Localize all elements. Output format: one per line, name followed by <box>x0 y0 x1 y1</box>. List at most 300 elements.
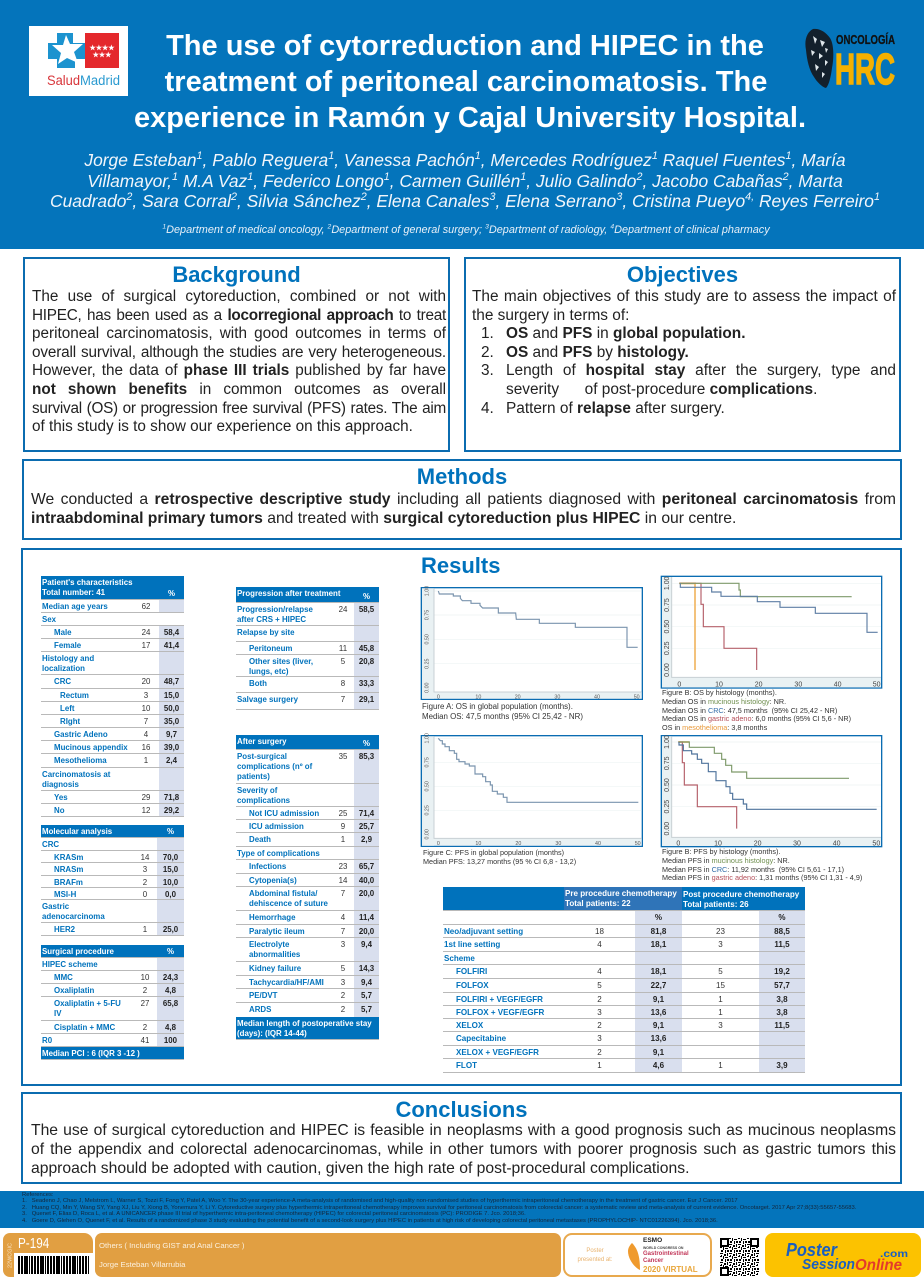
table: chemotherapy: 22,7 <box>651 980 666 990</box>
table: progression after treatment: 33,3 <box>359 678 374 688</box>
table: chemotherapy: 11,5 <box>774 1020 790 1030</box>
footer: category and presenter: Jorge Esteban Villarrubia <box>99 1260 185 1269</box>
table: after surgery <box>236 735 379 1040</box>
table: surgical procedure: 100 <box>164 1036 177 1044</box>
table: molecular analysis: KRASm <box>54 852 83 862</box>
chart C: PFS in global population: 40 <box>595 841 601 847</box>
logo: Oncología HRC <box>805 28 895 90</box>
table: chemotherapy: 81,8 <box>651 926 666 936</box>
table: patient's characteristics: 29 <box>142 792 150 802</box>
table: molecular analysis <box>41 825 184 936</box>
chart B: OS by histology <box>660 576 882 689</box>
table: chemotherapy: Total patients: 22 <box>565 899 631 908</box>
table: patient's characteristics: 58,4 <box>164 628 179 636</box>
table: patient's characteristics: 62 <box>142 602 150 610</box>
text: background: survival (OS) or progression free survival (PFS) rates. The aim <box>32 400 446 417</box>
table: after surgery: 40,0 <box>359 876 374 884</box>
table: molecular analysis: MSI-H <box>54 890 76 898</box>
table: after surgery: Not ICU admission <box>249 808 319 818</box>
table: after surgery: Post-surgical <box>237 752 287 760</box>
table: molecular analysis: 2 <box>143 878 147 886</box>
table: progression after treatment: 58,5 <box>359 604 374 614</box>
table: after surgery: ICU admission <box>249 822 304 830</box>
table: chemotherapy: FOLFIRI + VEGF/EGFR <box>456 994 543 1004</box>
table: chemotherapy: 18,1 <box>651 966 666 976</box>
chart B: OS by histology: 50 <box>873 682 881 689</box>
table: chemotherapy: 3,9 <box>776 1060 788 1070</box>
table: patient's characteristics: 10 <box>142 704 150 712</box>
footer: category and presenter <box>95 1233 561 1277</box>
table: after surgery: 4 <box>341 912 345 922</box>
session code: 22WCGIC <box>8 1243 14 1268</box>
congress name: Gastrointestinal <box>643 1251 689 1257</box>
text: background: not shown benefits in common outcomes as overall <box>32 381 446 398</box>
chart C: PFS in global population: 0.50 <box>424 781 430 792</box>
table: chemotherapy: 2 <box>597 1048 602 1056</box>
title <box>134 30 806 134</box>
table: patient's characteristics: Total number: 41 <box>42 588 105 597</box>
table: after surgery: 20,0 <box>359 926 374 936</box>
table: patient's characteristics: Female <box>54 640 81 650</box>
caption: figure B <box>662 688 851 732</box>
table: chemotherapy: 9,1 <box>653 1048 664 1056</box>
icon: wheat <box>628 1243 640 1270</box>
table: molecular analysis: Gastric <box>42 902 69 910</box>
congress name: 2020 VIRTUAL <box>643 1265 698 1274</box>
table: patient's characteristics: 35,0 <box>164 716 179 726</box>
footer: presented at badge <box>563 1233 712 1277</box>
barcode <box>14 1253 93 1277</box>
table: after surgery: Cytopenia(s) <box>249 876 297 884</box>
table: patient's characteristics: % <box>168 589 175 598</box>
table: after surgery: Median length of postoperative stay <box>237 1018 372 1028</box>
table: chemotherapy: 3 <box>597 1034 602 1042</box>
text: objectives: the surgery in terms of: <box>472 307 629 324</box>
references band: 4. Goere D, Glehen O, Quenet F, et al. Results of a randomized phase 3 study evaluating the potential benefit of a second-look surgery plus HIPEC in patients at high risk of developing colorectal peritoneal metastases (PROPHYLOCHIP- NTC01226394). Jco. 2018;36. <box>22 1218 718 1224</box>
text: objectives: 4. <box>481 400 494 417</box>
table: after surgery: 14,3 <box>359 964 374 972</box>
chart B: OS by histology: 0.75 <box>664 598 671 612</box>
chart A: OS in global population <box>420 586 643 700</box>
chart B: OS by histology: 1.00 <box>664 576 671 590</box>
chart D: PFS by histology: 50 <box>872 840 880 847</box>
congress name: Cancer <box>643 1258 663 1264</box>
table: patient's characteristics: 3 <box>144 690 148 700</box>
table: patient's characteristics: Gastric Adeno <box>54 730 108 738</box>
table: surgical procedure: Median PCI : 6 (IQR 3 -12 ) <box>42 1048 140 1058</box>
chart B: OS by histology: 0.25 <box>664 641 671 655</box>
affiliations: 1Department of medical oncology, 2Department of general surgery; 3Department of radiology, 4Department of clinical pharmacy <box>162 223 770 236</box>
table: chemotherapy: XELOX <box>456 1020 483 1030</box>
table: after surgery: Death <box>249 834 271 844</box>
table: after surgery: 9,4 <box>361 940 372 948</box>
table: after surgery: Abdominal fistula/ <box>249 888 317 898</box>
table: chemotherapy: 3 <box>597 1008 602 1016</box>
text: conclusions: The use of surgical cytoreduction and HIPEC is feasible in neoplasms with a good prognosis such as mucinous neoplasms <box>31 1122 896 1139</box>
text: objectives: OS and PFS in global population. <box>506 325 745 342</box>
text: conclusions <box>31 1122 896 1177</box>
table: chemotherapy: 2 <box>597 994 602 1004</box>
table: patient's characteristics: 17 <box>142 640 150 650</box>
chart A: OS in global population: 0.25 <box>424 658 430 669</box>
footer: QR code <box>720 1238 759 1276</box>
chart A: OS in global population: 0.50 <box>424 634 430 645</box>
table: molecular analysis: Molecular analysis <box>42 826 112 836</box>
table: chemotherapy: 18 <box>595 926 604 936</box>
table: progression after treatment: 7 <box>341 694 345 704</box>
table: surgical procedure <box>41 945 184 1060</box>
chart A: OS in global population: 0.00 <box>424 682 430 693</box>
table: surgical procedure: Surgical procedure <box>42 946 114 956</box>
text: objectives <box>472 288 896 417</box>
text: background: peritoneal carcinomatosis, with good outcomes in terms of <box>32 325 446 342</box>
table: surgical procedure: Oxaliplatin <box>54 986 94 994</box>
table: surgical procedure: 2 <box>143 1022 147 1032</box>
panel: background <box>23 257 450 452</box>
title: experience in Ramón y Cajal University Hospital. <box>134 102 806 134</box>
chart C: PFS in global population: 20 <box>515 841 521 847</box>
table: after surgery: Electrolyte <box>249 940 289 948</box>
table: patient's characteristics: diagnosis <box>42 780 79 788</box>
table: patient's characteristics: 4 <box>144 730 148 738</box>
table: chemotherapy: 5 <box>597 980 602 990</box>
chart D: PFS by histology <box>660 735 882 848</box>
table: after surgery: 2 <box>341 1004 345 1014</box>
table: patient's characteristics: 39,0 <box>164 742 179 752</box>
table: after surgery: 2,9 <box>361 834 372 844</box>
table: after surgery: complications (nº of <box>237 762 312 770</box>
table: patient's characteristics: 7 <box>144 716 148 726</box>
chart B: OS by histology: 0 <box>677 682 681 689</box>
heading: results: Results <box>421 553 500 578</box>
table: molecular analysis: NRASm <box>54 864 83 874</box>
chart C: PFS in global population: 30 <box>555 841 561 847</box>
heading: methods: Methods <box>417 464 507 489</box>
text: background: However, the data of phase III trials published by far have <box>32 362 446 379</box>
table: patient's characteristics: Rectum <box>60 690 89 700</box>
table: molecular analysis: 15,0 <box>163 864 178 874</box>
table: patient's characteristics: 1 <box>144 756 148 764</box>
caption: figure B: Median OS in gastric adeno: 6,0 months (95% CI 5,6 - NR) <box>662 714 851 723</box>
table: after surgery: Infections <box>249 862 286 870</box>
table: molecular analysis: 10,0 <box>163 878 178 886</box>
table: surgical procedure: 24,3 <box>163 972 178 982</box>
table: patient's characteristics: 41,4 <box>164 640 179 650</box>
chart B: OS by histology: 0.00 <box>664 663 671 677</box>
table: molecular analysis: 0,0 <box>165 890 176 898</box>
table: chemotherapy: 1 <box>718 1060 723 1070</box>
table: after surgery: dehiscence of suture <box>249 898 328 908</box>
table: chemotherapy: 11,5 <box>774 940 790 948</box>
title: treatment of peritoneal carcinomatosis. The <box>165 66 767 98</box>
table: chemotherapy: 9,1 <box>653 1020 664 1030</box>
panel: objectives <box>464 257 901 452</box>
table: after surgery: Paralytic ileum <box>249 926 305 936</box>
table: patient's characteristics: 24 <box>142 628 150 636</box>
table: progression after treatment: % <box>363 592 370 601</box>
table: after surgery: 5,7 <box>361 990 372 1000</box>
table: chemotherapy: 4 <box>597 940 602 948</box>
text: background: HIPEC, has been used as a locorregional approach to treat <box>32 307 446 324</box>
panel: methods <box>22 459 902 540</box>
chart C: PFS in global population: 0.25 <box>424 805 430 816</box>
chart D: PFS by histology: 0.00 <box>664 822 671 835</box>
chart B: OS by histology: 0.50 <box>664 620 671 633</box>
table: chemotherapy: 19,2 <box>774 966 790 976</box>
table: patient's characteristics: 15,0 <box>164 690 179 700</box>
table: chemotherapy: 3,8 <box>776 1008 788 1016</box>
text: background: overall survival, although the studies are very heterogeneous. <box>32 344 446 361</box>
table: patient's characteristics: 71,8 <box>164 792 179 802</box>
caption: figure D <box>662 847 862 882</box>
table: patient's characteristics: Mesothelioma <box>54 756 107 764</box>
references band: 3. Quenet F, Elias D, Roca L, et al. A UNICANCER phase III trial of hyperthermic intra-peritoneal chemotherapy (HIPEC) for colorectal peritoneal carcinomatosis (PC): PRODIGE 7. Jco. 2018;36. <box>22 1211 526 1217</box>
table: after surgery: % <box>363 739 370 748</box>
caption: figure D: Median PFS in mucinous histology: NR. <box>662 856 790 865</box>
text: conclusions: approach should be adopted with caution, given the high rate of post-procedural complications. <box>31 1160 689 1177</box>
table: chemotherapy: FOLFIRI <box>456 966 487 976</box>
footer: poster id and barcode <box>3 1233 93 1277</box>
chart D: PFS by histology: 0.75 <box>664 756 671 770</box>
caption: figure B: Median OS in mucinous histology: NR. <box>662 697 786 706</box>
text: background: of this study is to show our experience on this approach. <box>32 418 413 435</box>
table: patient's characteristics: 50,0 <box>164 704 179 712</box>
table: after surgery: ARDS <box>249 1004 271 1014</box>
table: patient's characteristics: 9,7 <box>166 730 177 738</box>
table: patient's characteristics: CRC <box>54 676 71 686</box>
table: progression after treatment: 11 <box>339 644 347 652</box>
text: objectives: The main objectives of this study are to assess the impact of <box>472 288 896 305</box>
text: methods: We conducted a retrospective descriptive study including all patients diagnosed with peritoneal carcinomatosis from <box>31 491 896 508</box>
table: after surgery: 5 <box>341 964 345 972</box>
table: after surgery: Hemorrhage <box>249 912 295 922</box>
caption: figure A <box>422 702 583 721</box>
table: after surgery: 1 <box>341 834 345 844</box>
table: after surgery: Type of complications <box>237 848 320 858</box>
table: surgical procedure: 10 <box>141 972 149 982</box>
table: patient's characteristics: Carcinomatosis at <box>42 770 110 778</box>
table: chemotherapy: 1st line setting <box>444 940 500 948</box>
header banner <box>0 0 924 249</box>
table: patient's characteristics: RIght <box>60 716 80 726</box>
table: after surgery: 9,4 <box>361 978 372 986</box>
logo: SaludMadrid: Madrid <box>80 73 120 88</box>
chart D: PFS by histology: 1.00 <box>664 735 671 749</box>
table: after surgery: 85,3 <box>359 752 374 760</box>
table: after surgery: PE/DVT <box>249 990 278 1000</box>
table: progression after treatment: Progression/relapse <box>237 604 313 614</box>
table: chemotherapy: FOLFOX + VEGF/EGFR <box>456 1008 544 1016</box>
table: progression after treatment: 24 <box>339 604 347 614</box>
table: chemotherapy: Total patients: 26 <box>683 900 749 909</box>
table: surgical procedure: 27 <box>141 998 149 1008</box>
table: molecular analysis: BRAFm <box>54 878 83 886</box>
text: objectives: 2. <box>481 344 494 361</box>
chart C: PFS in global population: 50 <box>635 841 641 847</box>
table: patient's characteristics: 48,7 <box>164 676 179 686</box>
table: after surgery: 3 <box>341 940 345 948</box>
table: after surgery: 3 <box>341 978 345 986</box>
table: chemotherapy: 13,6 <box>651 1008 666 1016</box>
table: progression after treatment: Both <box>249 678 267 688</box>
chart D: PFS by histology: 0 <box>676 840 680 847</box>
table: after surgery: 23 <box>339 862 347 870</box>
footer: PosterSessionOnline logo: Session <box>802 1256 855 1273</box>
table: after surgery: 71,4 <box>359 808 374 818</box>
table: molecular analysis: 70,0 <box>163 852 178 862</box>
table: patient's characteristics: localization <box>42 664 85 672</box>
caption: figure C <box>423 848 576 866</box>
caption: figure A: Figure A: OS in global population (months). <box>422 702 573 711</box>
logo: SaludMadrid: Salud <box>47 73 80 88</box>
table: molecular analysis: 1 <box>143 924 147 934</box>
congress name: ESMO <box>643 1237 662 1244</box>
table: progression after treatment: 45,8 <box>359 644 374 652</box>
text: conclusions: of the appendix and colorectal adenocarcinomas, while in other tumors with poorer prognosis such as gastric tumors this <box>31 1141 896 1158</box>
table: chemotherapy: 4,6 <box>653 1060 664 1070</box>
text: methods <box>31 491 896 527</box>
table: chemotherapy: 1 <box>718 1008 723 1016</box>
table: chemotherapy: % <box>778 912 786 922</box>
table: patient's characteristics: Male <box>54 628 72 636</box>
text: background <box>32 288 446 435</box>
table: patient's characteristics: Histology and <box>42 654 94 662</box>
table: after surgery: 65,7 <box>359 862 374 870</box>
table: patient's characteristics: Sex <box>42 614 56 624</box>
table: after surgery: Tachycardia/HF/AMI <box>249 978 324 986</box>
table: after surgery: 2 <box>341 990 345 1000</box>
title: The use of cytorreduction and HIPEC in the <box>166 30 764 62</box>
table: after surgery: Severity of <box>237 786 277 794</box>
table: after surgery: complications <box>237 796 290 804</box>
caption: figure D: Figure B: PFS by histology (months). <box>662 847 780 856</box>
table: chemotherapy: XELOX + VEGF/EGFR <box>456 1048 539 1056</box>
table: after surgery: 7 <box>341 926 345 936</box>
chart C: PFS in global population: 0.00 <box>424 829 430 840</box>
table: progression after treatment: 5 <box>341 656 345 666</box>
text: objectives: 3. <box>481 362 494 379</box>
chart C: PFS in global population <box>420 733 643 847</box>
table: chemotherapy: % <box>655 912 662 922</box>
table: patient's characteristics: Yes <box>54 792 68 802</box>
caption: figure B: Figure B: OS by histology (months). <box>662 688 777 697</box>
table: chemotherapy: Scheme <box>444 954 475 962</box>
text: objectives: 1. <box>481 325 494 342</box>
text: methods: intraabdominal primary tumors and treated with surgical cytoreduction plus HIPEC in our centre. <box>31 510 736 527</box>
references band: 2. Huang CQ, Min Y, Wang SY, Yang XJ, Liu Y, Xiong B, Yonemura Y, Li Y. Cytoreductive surgery plus hyperthermic intraperitoneal chemotherapy improves survival for peritoneal carcinomatosis from colorectal cancer: a systematic review and meta-analysis of current evidence. Oncotarget. 2017 Apr 27;8(33):55657-55683. <box>22 1205 856 1211</box>
footer: PosterSessionOnline logo: .com <box>880 1249 908 1260</box>
presented at label <box>577 1248 613 1262</box>
chart D: PFS by histology: 0.50 <box>664 778 671 792</box>
table: surgical procedure: IV <box>54 1008 61 1018</box>
table: surgical procedure: % <box>167 946 174 956</box>
table: patient's characteristics: Mucinous appendix <box>54 742 128 752</box>
panel: results <box>21 548 902 1086</box>
text: objectives: Pattern of relapse after surgery. <box>506 400 725 417</box>
table: after surgery: 25 <box>339 808 347 818</box>
table: chemotherapy: 3 <box>718 940 723 948</box>
chart D: PFS by histology: 10 <box>714 840 722 847</box>
footer: PosterSessionOnline logo: Online <box>855 1257 902 1274</box>
presented at label: presented at: <box>577 1256 613 1262</box>
table: chemotherapy: 1 <box>597 1060 602 1070</box>
table: patient's characteristics: 12 <box>142 806 150 814</box>
authors: Jorge Esteban1, Pablo Reguera1, Vanessa Pachón1, Mercedes Rodríguez1 Raquel Fuentes1, María <box>84 150 846 170</box>
table: surgical procedure: 4,8 <box>165 986 176 994</box>
table: after surgery: 9 <box>341 822 345 830</box>
table: progression after treatment: Peritoneum <box>249 644 292 652</box>
table: chemotherapy: Pre procedure chemotherapy <box>565 889 677 898</box>
table: patient's characteristics: Left <box>60 704 74 712</box>
table: progression after treatment: 20,8 <box>359 656 374 666</box>
caption: figure C: Median PFS: 13,27 months (95 % CI 6,8 - 13,2) <box>423 857 576 866</box>
chart A: OS in global population: 0.75 <box>424 610 430 620</box>
chart C: PFS in global population: 1.00 <box>424 733 430 744</box>
table: after surgery: 14 <box>339 876 347 884</box>
table: chemotherapy: 18,1 <box>651 940 666 948</box>
table: chemotherapy: 23 <box>716 926 725 936</box>
table: after surgery: 5,7 <box>361 1004 372 1014</box>
caption: figure B: Median OS in CRC: 47,5 months (95% CI 25,42 - NR) <box>662 706 837 715</box>
table: progression after treatment: Salvage surgery <box>237 694 298 704</box>
table: chemotherapy: 57,7 <box>774 980 790 990</box>
table: after surgery: Kidney failure <box>249 964 301 972</box>
text: background: The use of surgical cytoreduction, combined or not with <box>32 288 446 305</box>
table: after surgery: 20,0 <box>359 888 374 898</box>
references band: References: <box>22 1192 54 1198</box>
table: molecular analysis: 14 <box>141 852 149 862</box>
table: molecular analysis: 3 <box>143 864 147 874</box>
table: chemotherapy: 3 <box>718 1020 723 1030</box>
table: surgical procedure: 65,8 <box>163 998 178 1008</box>
congress name: WORLD CONGRESS ON <box>643 1246 683 1250</box>
table: surgical procedure: Oxaliplatin + 5-FU <box>54 998 121 1008</box>
table: patient's characteristics: 2,4 <box>166 756 177 764</box>
table: molecular analysis: adenocarcinoma <box>42 912 105 920</box>
table: patient's characteristics: No <box>54 806 65 814</box>
footer: PosterSessionOnline logo: Poster <box>786 1240 838 1260</box>
table: patient's characteristics <box>41 576 184 817</box>
table: chemotherapy: 1 <box>718 994 723 1004</box>
table: progression after treatment: after CRS + HIPEC <box>237 614 306 624</box>
table: chemotherapy: 5 <box>718 966 723 976</box>
table: chemotherapy: FOLFOX <box>456 980 489 990</box>
chart B: OS by histology: 20 <box>755 682 763 689</box>
table: patient's characteristics: 29,2 <box>164 806 179 814</box>
table: after surgery: 35 <box>339 752 347 760</box>
table: surgical procedure: 2 <box>143 986 147 994</box>
table: molecular analysis: 0 <box>143 890 147 898</box>
panel: conclusions <box>21 1092 902 1184</box>
authors <box>50 150 880 211</box>
table: patient's characteristics: Patient's characteristics <box>42 578 132 587</box>
chart B: OS by histology: 10 <box>715 682 723 689</box>
chart D: PFS by histology: 0.25 <box>664 800 671 813</box>
table: after surgery: 7 <box>341 888 345 898</box>
footer: category and presenter: Others ( Including GIST and Anal Cancer ) <box>99 1241 244 1250</box>
chart C: PFS in global population: 10 <box>475 841 481 847</box>
logo: SaludMadrid: ★★★ <box>93 51 112 59</box>
presented at label: Poster <box>586 1248 604 1254</box>
table: chemotherapy: 15 <box>716 980 725 990</box>
table: progression after treatment: Progression after treatment <box>237 588 340 598</box>
table: after surgery: patients) <box>237 772 270 780</box>
chart A: OS in global population: 1.00 <box>424 586 430 596</box>
footer: PosterSessionOnline logo <box>765 1233 921 1277</box>
logo: SaludMadrid: ★★★★ <box>89 44 115 52</box>
authors: Cuadrado2, Sara Corral2, Silvia Sánchez2, Elena Canales3, Elena Serrano3, Cristina Pueyo4, Reyes Ferreiro1 <box>50 191 880 211</box>
table: surgical procedure: R0 <box>42 1036 52 1044</box>
